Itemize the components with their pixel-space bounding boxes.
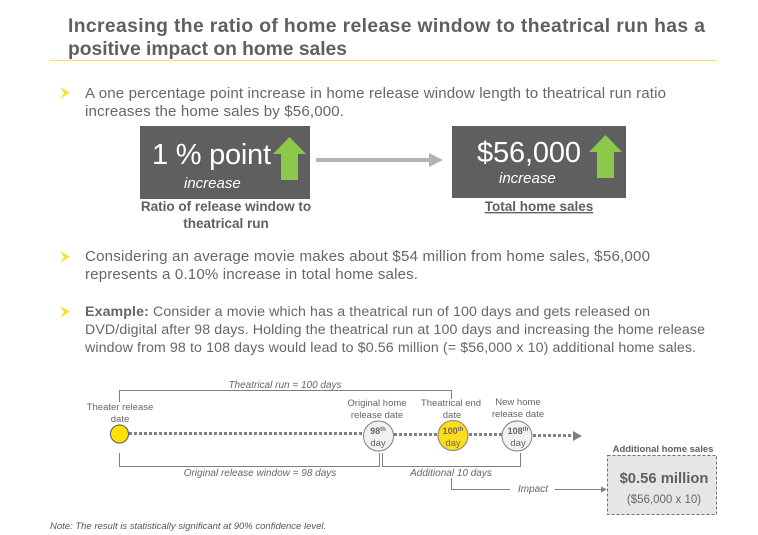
- bracket: theatrical run: [120, 380, 452, 402]
- marker: 108th day: release date: [492, 409, 544, 420]
- panel: ratio increase: [140, 126, 310, 199]
- bullet: average movie: Considering an average movie makes about $54 million from home sales, $56,000: [85, 248, 650, 265]
- bullet: example: window from 98 to 108 days would lead to $0.56 million (= $56,000 x 10) additional home sales.: [84, 340, 696, 356]
- panel: additional home sales: Additional home sales: [613, 444, 713, 455]
- label: ratio of release window: theatrical run: [183, 216, 269, 231]
- panel: home sales increase: increase: [499, 170, 556, 187]
- bullet: one percentage point: A one percentage point increase in home release window length to theatrical run ratio: [85, 85, 666, 102]
- bracket: additional 10 days: Additional 10 days: [409, 468, 492, 479]
- marker: 100th day: Theatrical end: [421, 398, 481, 409]
- bracket: original release window: Original release window = 98 days: [184, 468, 336, 479]
- bullet: one percentage point: increases the home sales by $56,000.: [85, 103, 344, 120]
- panel: additional home sales: $0.56 million: [620, 471, 708, 487]
- marker: 98th day: release date: [351, 410, 403, 421]
- panel: home sales increase: [452, 126, 626, 198]
- note: Note: The result is statistically significant at 90% confidence level.: [50, 521, 326, 532]
- marker: 98th day: [347, 398, 407, 451]
- bullet: average movie: [60, 248, 650, 283]
- marker: 98th day: th: [380, 427, 386, 433]
- bullet: average movie: represents a 0.10% increase in total home sales.: [85, 266, 418, 283]
- title: Increasing the ratio of home release window to theatrical run has a: [68, 16, 705, 37]
- arrow: impact: Impact: [518, 484, 549, 495]
- marker: 100th day: 100: [443, 426, 458, 436]
- panel: home sales increase: $56,000: [477, 137, 581, 169]
- icon: green up arrow: [273, 137, 306, 180]
- marker: 98th day: 98: [370, 426, 380, 436]
- arrow: ratio to sales: [316, 153, 443, 167]
- marker: 100th day: date: [443, 410, 461, 421]
- marker: 100th day: [421, 398, 481, 450]
- marker: 108th day: day: [510, 438, 526, 449]
- marker: theater release: Theater release: [87, 402, 153, 413]
- marker: 108th day: [492, 397, 544, 451]
- label: ratio of release window: [141, 199, 311, 231]
- label: ratio of release window: Ratio of release window to: [141, 199, 311, 214]
- marker: 98th day: Original home: [347, 398, 407, 409]
- marker: theater release: [87, 402, 153, 443]
- marker: 108th day: New home: [495, 397, 541, 408]
- panel: additional home sales: ($56,000 x 10): [627, 494, 701, 506]
- title: positive impact on home sales: [68, 39, 347, 60]
- panel: additional home sales: [608, 444, 716, 514]
- bullet: one percentage point: [60, 85, 666, 120]
- timeline diagram: [87, 380, 607, 495]
- arrow: impact: [452, 478, 607, 495]
- panel: ratio increase: increase: [184, 175, 241, 192]
- marker: 98th day: day: [370, 438, 386, 449]
- bullet: example: [60, 304, 705, 356]
- title: [68, 16, 705, 60]
- bullet: example: Example: Consider a movie which has a theatrical run of 100 days and gets released on: [85, 304, 650, 320]
- bracket: additional 10 days: [382, 453, 520, 479]
- marker: 108th day: th: [523, 427, 529, 433]
- marker: 108th day: 108: [508, 426, 523, 436]
- panel: ratio increase: 1 % point: [152, 139, 271, 171]
- marker: theater release: date: [111, 414, 129, 425]
- timeline dotted line: [129, 431, 582, 441]
- icon: green up arrow: [589, 135, 622, 178]
- bracket: original release window: [120, 453, 380, 479]
- bracket: theatrical run: Theatrical run = 100 days: [228, 380, 342, 391]
- marker: 100th day: day: [445, 438, 461, 449]
- bullet: example: DVD/digital after 98 days. Holding the theatrical run at 100 days and increasing the home release: [85, 322, 705, 338]
- marker: 100th day: th: [458, 427, 464, 433]
- label: total home sales: Total home sales: [485, 199, 593, 214]
